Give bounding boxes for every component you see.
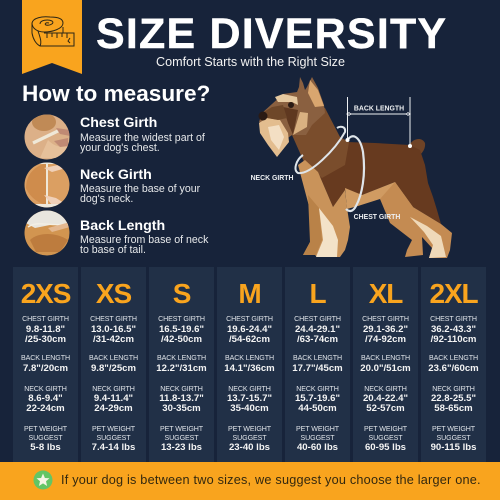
- size column: 2XS: 22-24cm: [26, 403, 65, 414]
- text: neck girth description: [80, 183, 200, 205]
- size column: XL: 52-57cm: [366, 403, 405, 414]
- size column: M: 35-40cm: [230, 403, 269, 414]
- size column: 2XS: 2XS: [21, 278, 70, 309]
- tan cheek: [293, 112, 308, 135]
- size column: M: BACK LENGTH: [225, 354, 274, 362]
- size column: L: CHEST GIRTH: [294, 315, 341, 323]
- size column: XL: 20.4-22.4": [363, 393, 408, 404]
- size column: 2XS: 5-8 lbs: [30, 442, 61, 453]
- size column: L: NECK GIRTH: [296, 385, 339, 393]
- size column: 2XS: 9.8-11.8": [26, 324, 65, 335]
- dark cheek: [283, 107, 298, 135]
- size column: M: 14.1"/36cm: [224, 363, 275, 374]
- size column: S: NECK GIRTH: [160, 385, 203, 393]
- size column: M: CHEST GIRTH: [226, 315, 273, 323]
- size column: XL: 60-95 lbs: [365, 442, 406, 453]
- photo: back length: [24, 210, 70, 256]
- size column: XL: BACK LENGTH: [361, 354, 410, 362]
- size column: S: SUGGEST: [164, 434, 198, 442]
- tail: [410, 139, 425, 157]
- beard highlight: [268, 125, 284, 150]
- head: [259, 77, 325, 140]
- text: chest girth description: [80, 132, 205, 154]
- text: neck girth description: Measure the base of your: [80, 183, 200, 195]
- size column: L: 44-50cm: [298, 403, 337, 414]
- size column: XS: XS: [96, 278, 131, 309]
- size column: 2XS: 8.6-9.4": [28, 393, 63, 404]
- size column: XS: NECK GIRTH: [92, 385, 135, 393]
- size column: S: BACK LENGTH: [157, 354, 206, 362]
- size column: XS: BACK LENGTH: [89, 354, 138, 362]
- size column: 2XS: NECK GIRTH: [24, 385, 67, 393]
- size column: S: 11.8-13.7": [159, 393, 204, 404]
- text: chest girth description: your dog's chest.: [80, 142, 160, 154]
- subtitle: Comfort Starts with the Right Size: [156, 55, 345, 69]
- title: SIZE DIVERSITY: [96, 10, 447, 58]
- muzzle top: [262, 105, 287, 120]
- size column: L: L: [309, 278, 326, 309]
- label: neck girth: NECK GIRTH: [251, 175, 293, 182]
- size column: XL: PET WEIGHT: [364, 425, 407, 433]
- beard: [259, 118, 289, 157]
- size column: L: 15.7-19.6": [295, 393, 340, 404]
- size column: L: 24.4-29.1": [295, 324, 340, 335]
- size column: 2XS: BACK LENGTH: [21, 354, 70, 362]
- size column: XL: 20.0"/51cm: [360, 363, 411, 374]
- size column: 2XL: [421, 267, 486, 462]
- size column: M: 23-40 lbs: [229, 442, 270, 453]
- text: back length description: to base of tail.: [80, 244, 146, 256]
- size column: XS: 24-29cm: [94, 403, 133, 414]
- text: back length description: [80, 234, 208, 256]
- size column: XS: 9.8"/25cm: [91, 363, 136, 374]
- size column: XL: XL: [369, 278, 402, 309]
- hind leg: [380, 182, 452, 258]
- size column: S: 30-35cm: [162, 403, 201, 414]
- size column: S: [149, 267, 214, 462]
- size column: M: 19.6-24.4": [227, 324, 272, 335]
- size column: XS: 13.0-16.5": [91, 324, 136, 335]
- eyebrow: [275, 94, 298, 105]
- heading: how to measure: How to measure?: [22, 81, 210, 106]
- size column: L: 40-60 lbs: [297, 442, 338, 453]
- text: back length: Back Length: [80, 218, 165, 234]
- front leg cream fur: [316, 208, 338, 257]
- size column: S: CHEST GIRTH: [158, 315, 205, 323]
- size column: S: 12.2"/31cm: [156, 363, 207, 374]
- text: chest girth: Chest Girth: [80, 115, 157, 131]
- size column: 2XL: 36.2-43.3": [431, 324, 476, 335]
- label: back length: BACK LENGTH: [354, 106, 404, 112]
- size column: XL: CHEST GIRTH: [362, 315, 409, 323]
- neck: [292, 100, 349, 178]
- size column: 2XL: 22.8-25.5": [431, 393, 476, 404]
- far front leg shade: [303, 195, 322, 255]
- size column: 2XS: CHEST GIRTH: [22, 315, 69, 323]
- size column: S: S: [173, 278, 190, 309]
- size column: XL: SUGGEST: [368, 434, 402, 442]
- icon: green star: [34, 470, 52, 490]
- label: chest girth: CHEST GIRTH: [354, 214, 400, 221]
- photo: chest girth: [24, 114, 70, 160]
- size column: 2XS: 7.8"/20cm: [23, 363, 68, 374]
- size column: 2XL: 23.6"/60cm: [428, 363, 479, 374]
- size column: M: PET WEIGHT: [228, 425, 271, 433]
- ribbon badge with tape measure icon: [22, 0, 82, 74]
- size column: 2XS: /25-30cm: [25, 334, 66, 345]
- text: chest girth description: Measure the widest part of: [80, 132, 205, 144]
- size column: M: M: [238, 278, 261, 309]
- size column: 2XL: BACK LENGTH: [429, 354, 478, 362]
- neck girth ring: [296, 127, 345, 173]
- size column: XS: PET WEIGHT: [92, 425, 135, 433]
- size column: 2XS: SUGGEST: [28, 434, 62, 442]
- size column: XL: [353, 267, 418, 462]
- text: neck girth description: dog's neck.: [80, 193, 133, 205]
- dog body: [305, 140, 441, 224]
- size column: S: PET WEIGHT: [160, 425, 203, 433]
- text: neck girth: Neck Girth: [80, 167, 152, 183]
- size column: XS: /31-42cm: [93, 334, 134, 345]
- size column: 2XL: 58-65cm: [434, 403, 473, 414]
- size column: L: [285, 267, 350, 462]
- size column: M: SUGGEST: [232, 434, 266, 442]
- nose: [258, 112, 268, 120]
- size column: XL: /74-92cm: [365, 334, 406, 345]
- chest girth ring: [346, 136, 364, 211]
- size column: XL: 29.1-36.2": [363, 324, 408, 335]
- tip text: If your dog is between two sizes, we suggest you choose the larger one.: [61, 473, 481, 487]
- size column: 2XL: SUGGEST: [436, 434, 470, 442]
- size column: M: 13.7-15.7": [227, 393, 272, 404]
- size column: 2XL: NECK GIRTH: [432, 385, 475, 393]
- size column: 2XS: PET WEIGHT: [24, 425, 67, 433]
- back length annotation: [346, 97, 412, 148]
- size column: XS: [81, 267, 146, 462]
- size column: M: [217, 267, 282, 462]
- size column: 2XL: 2XL: [429, 278, 478, 309]
- text: back length description: Measure from base of neck: [80, 234, 208, 246]
- size column: XS: 7.4-14 lbs: [92, 442, 135, 453]
- size column: S: 13-23 lbs: [161, 442, 202, 453]
- size column: XS: CHEST GIRTH: [90, 315, 137, 323]
- hind leg cream fur: [410, 217, 446, 258]
- size column: XL: NECK GIRTH: [364, 385, 407, 393]
- size column: L: SUGGEST: [300, 434, 334, 442]
- size column: 2XL: /92-110cm: [431, 334, 476, 345]
- inner ear: [308, 80, 324, 107]
- size column: M: NECK GIRTH: [228, 385, 271, 393]
- eye: [288, 102, 294, 108]
- size column: M: /54-62cm: [229, 334, 270, 345]
- belly: [345, 182, 413, 209]
- size column: 2XL: CHEST GIRTH: [430, 315, 477, 323]
- front leg: [298, 160, 350, 257]
- footer tip bar: [0, 462, 500, 500]
- size column: XS: 9.4-11.4": [94, 393, 133, 404]
- size column: 2XS: [13, 267, 78, 462]
- photo: neck girth: [24, 162, 70, 208]
- size column: L: 17.7"/45cm: [292, 363, 343, 374]
- size column: L: BACK LENGTH: [293, 354, 342, 362]
- size column: 2XL: 90-115 lbs: [431, 442, 476, 453]
- dog illustration with measure annotations: [251, 77, 452, 258]
- size column: S: /42-50cm: [161, 334, 202, 345]
- size column: XS: SUGGEST: [96, 434, 130, 442]
- size column: S: 16.5-19.6": [159, 324, 204, 335]
- size column: L: PET WEIGHT: [296, 425, 339, 433]
- panel: measuring instructions: [24, 114, 208, 256]
- size column: 2XL: PET WEIGHT: [432, 425, 475, 433]
- size column: L: /63-74cm: [297, 334, 338, 345]
